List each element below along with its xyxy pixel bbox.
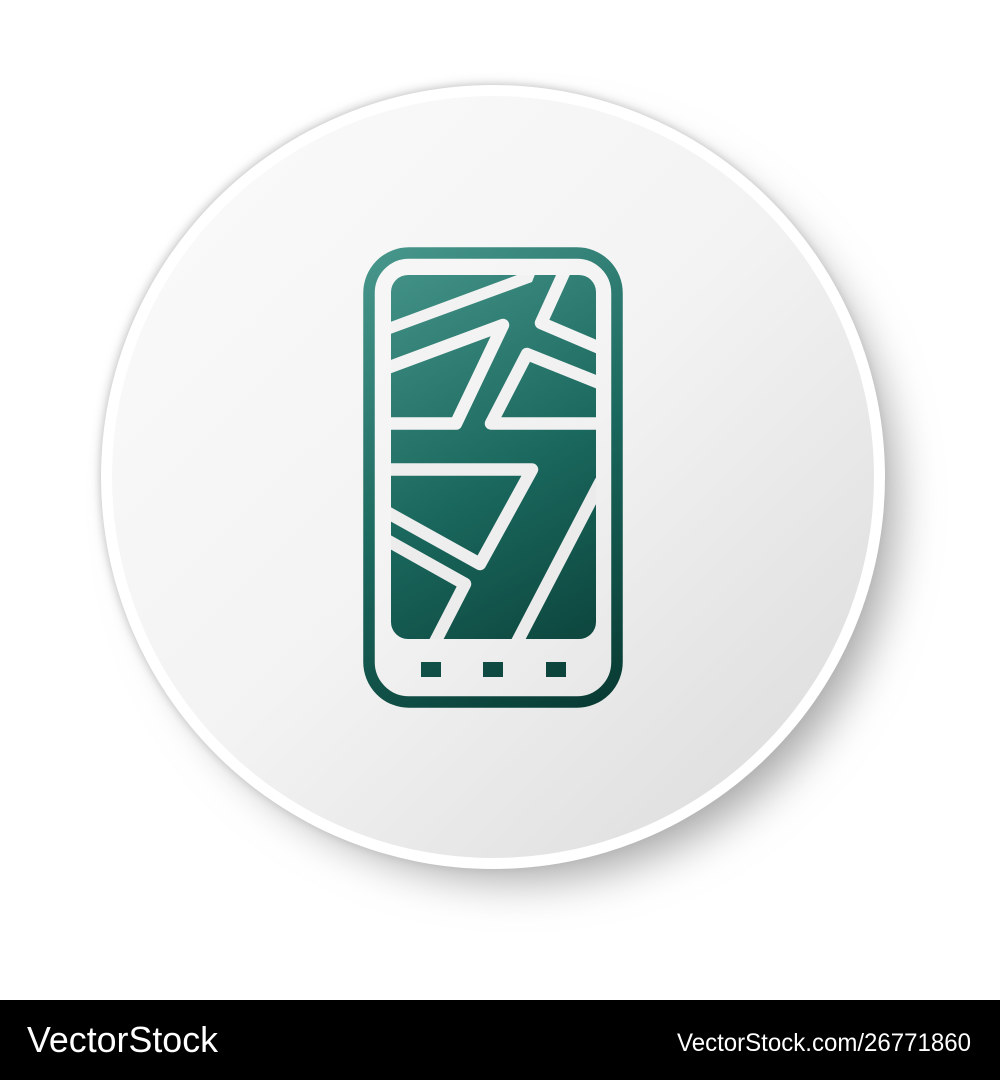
footer image id text: VectorStock.com/26771860 xyxy=(677,1029,971,1057)
phone body outline xyxy=(369,253,617,702)
drop shadow of round button xyxy=(101,85,895,880)
map screen xyxy=(391,275,596,639)
home buttons xyxy=(421,662,566,677)
map roads xyxy=(391,275,596,639)
footer bar xyxy=(0,1000,1000,1080)
icon: phone with map xyxy=(369,253,617,702)
footer logo text: VectorStock xyxy=(27,1019,219,1060)
round button xyxy=(101,85,885,869)
